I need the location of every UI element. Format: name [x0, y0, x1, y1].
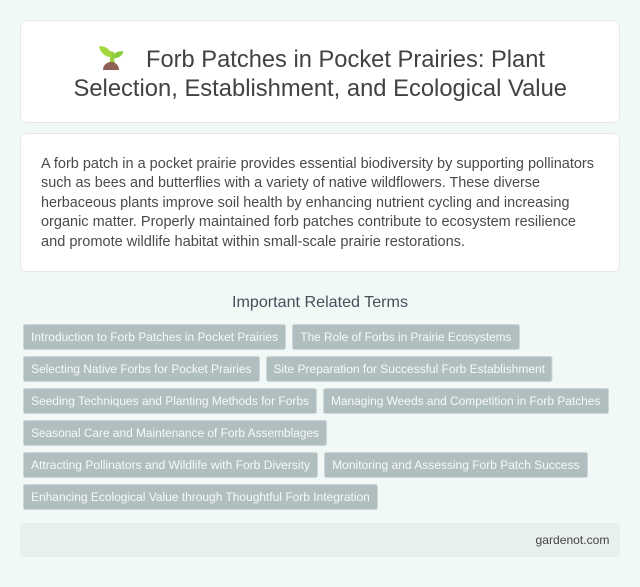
heading: important related terms: Important Related Terms [232, 294, 408, 311]
title text [74, 46, 567, 102]
tag: Site Preparation for Successful Forb Establishment [274, 362, 546, 376]
description text: and promote wildlife habitat within small-scale prairie restorations. [41, 234, 465, 250]
icon: seedling [99, 46, 124, 70]
tag: Managing Weeds and Competition in Forb Patches [331, 394, 600, 408]
tag [292, 324, 520, 350]
title text: Forb Patches in Pocket Prairies: Plant [146, 46, 545, 73]
description text: herbaceous plants improve soil health by enhancing nutrient cycling and increasing [41, 195, 570, 211]
tag [24, 356, 260, 382]
related terms tags [24, 324, 608, 510]
tag: The Role of Forbs in Prairie Ecosystems [300, 330, 511, 344]
tag: Monitoring and Assessing Forb Patch Success [332, 458, 580, 472]
tag [266, 356, 552, 382]
tag [24, 388, 316, 414]
tag [324, 388, 608, 414]
description text: such as bees and butterflies with a variety of native wildflowers. These diverse [41, 175, 540, 191]
tag: Attracting Pollinators and Wildlife with Forb Diversity [31, 458, 311, 472]
tag: Seasonal Care and Maintenance of Forb Assemblages [31, 426, 319, 440]
description text: A forb patch in a pocket prairie provides essential biodiversity by supporting pollinators [41, 156, 594, 172]
tag: Selecting Native Forbs for Pocket Prairies [31, 362, 251, 376]
tag: Enhancing Ecological Value through Thoughtful Forb Integration [31, 490, 370, 504]
description text [41, 156, 594, 250]
panel: description card [20, 134, 620, 272]
description text: organic matter. Properly maintained forb patches contribute to ecosystem resilience [41, 214, 576, 230]
tag [24, 484, 378, 510]
tag: Introduction to Forb Patches in Pocket Prairies [31, 330, 278, 344]
tag [24, 452, 318, 478]
panel: title card [20, 20, 620, 122]
footer: gardenot.com [536, 533, 610, 547]
title text: Selection, Establishment, and Ecological Value [74, 75, 567, 102]
tag: Seeding Techniques and Planting Methods for Forbs [31, 394, 309, 408]
tag [324, 452, 588, 478]
tag [24, 420, 326, 446]
tag [24, 324, 286, 350]
footer [20, 523, 620, 557]
